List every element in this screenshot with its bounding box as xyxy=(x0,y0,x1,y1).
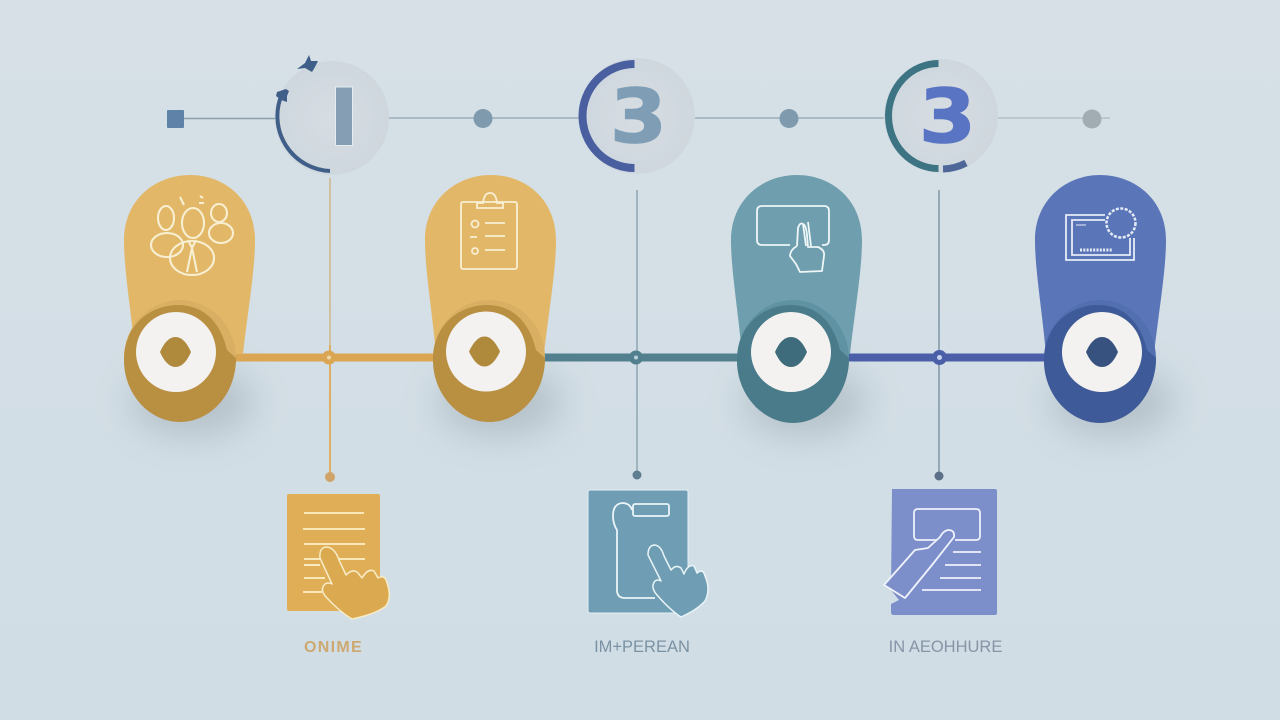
label: online: ONIME xyxy=(304,639,363,656)
step badge 1 xyxy=(275,55,389,175)
vertical connector lines xyxy=(325,178,944,482)
stage 1 pin xyxy=(124,175,255,422)
top timeline rail xyxy=(167,109,1110,128)
step badge 2: 3 xyxy=(610,74,667,160)
icon: text lines xyxy=(303,513,365,592)
knob shadows xyxy=(130,368,1174,436)
icon: pointing hand teal xyxy=(648,545,708,617)
icon: tablet outline xyxy=(613,503,669,598)
step badge 2 xyxy=(579,58,695,174)
step badge 3 xyxy=(884,59,998,173)
label: in-person: IM+PEREAN xyxy=(594,638,690,656)
horizontal stage connectors xyxy=(232,350,1050,365)
icon: certificate with seal xyxy=(1066,208,1136,260)
in-person card xyxy=(588,490,688,613)
icon: form and lines xyxy=(914,509,981,590)
stage 4 pin xyxy=(1035,175,1166,423)
icon: pointing hand gold xyxy=(320,547,389,619)
label: in-branch: IN AEOHHURE xyxy=(889,638,1002,656)
in-branch card xyxy=(884,489,997,615)
online card xyxy=(287,494,380,611)
stage 2 pin xyxy=(425,175,556,422)
icon: hand tapping screen xyxy=(757,206,829,272)
icon: pointing hand blue xyxy=(884,530,954,598)
step badge 3: 3 xyxy=(919,74,976,160)
stage 3 pin xyxy=(731,175,862,423)
icon: clipboard checklist xyxy=(461,193,517,269)
icon: team of people xyxy=(151,196,233,275)
